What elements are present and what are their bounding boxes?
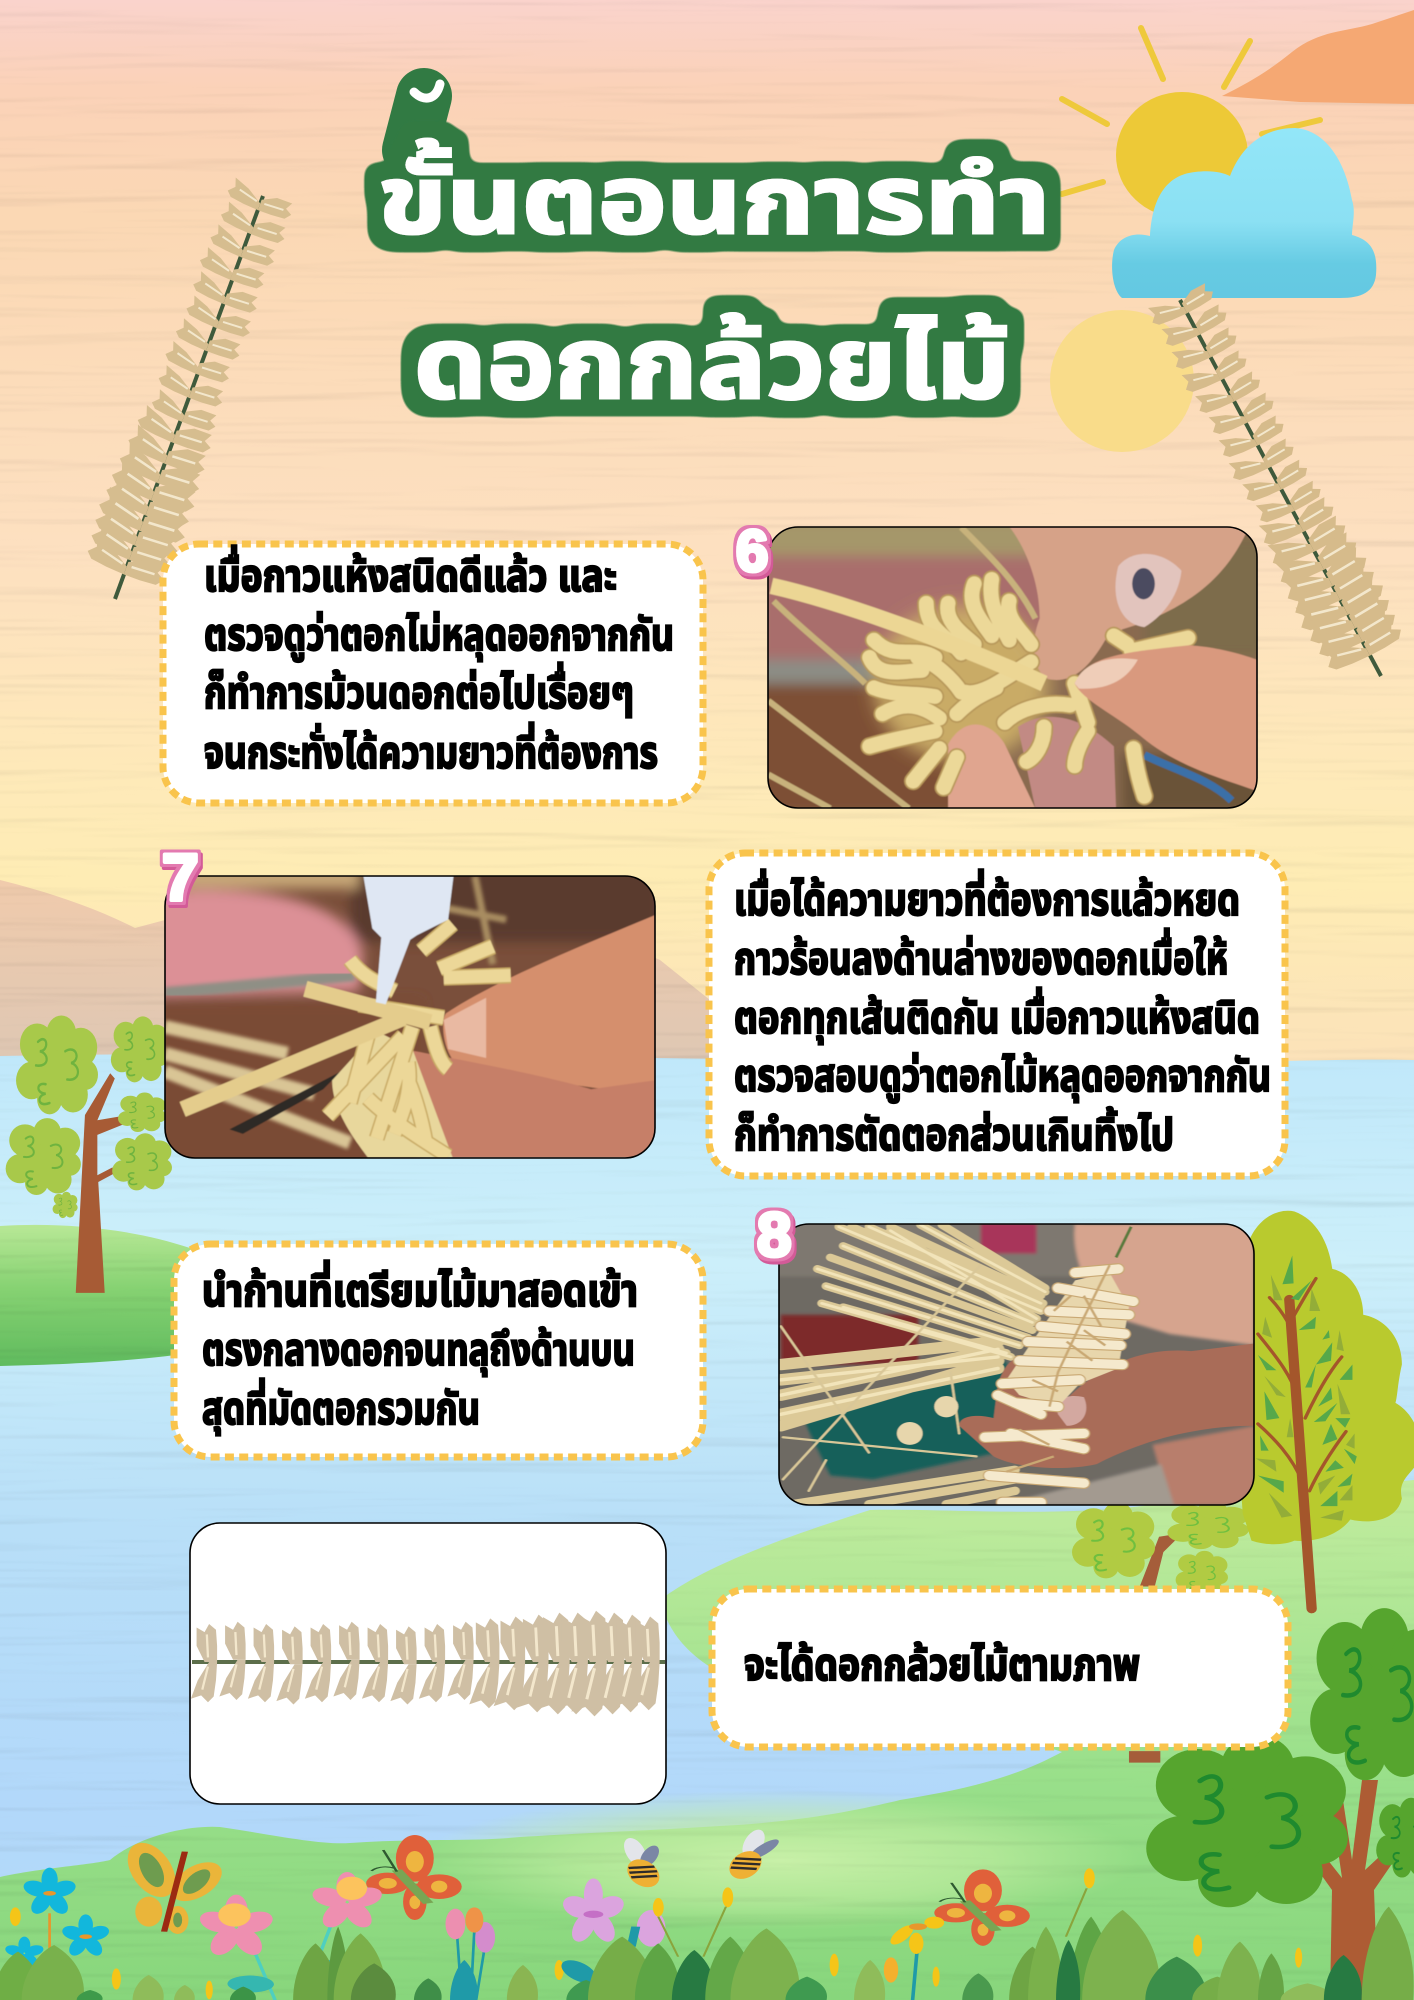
tree: dark green trees lower right: [1146, 1608, 1414, 2000]
text block: [734, 869, 1271, 1160]
text block: ตรวจสอบดูว่าตอกไม้หลุดออกจากกัน: [734, 1052, 1271, 1103]
panel: step 6 text: [163, 544, 703, 803]
photo content: [774, 1219, 1254, 1506]
flowers: tulips: [445, 1907, 495, 2000]
background sky: [0, 0, 1414, 1100]
foreground leaves: [0, 1907, 1414, 2000]
title outline accent: raised tone mark: [410, 84, 440, 150]
icon: blue cloud: [1112, 128, 1376, 298]
text block: เมื่อได้ความยาวที่ต้องการแล้วหยด: [734, 869, 1240, 925]
text block: สุดที่มัดตอกรวมกัน: [202, 1378, 480, 1436]
decoration: dried flower left: [79, 172, 308, 599]
panel: finished flower photo: [190, 1523, 666, 1804]
bee: left: [615, 1836, 678, 1888]
hill highlight: [420, 1790, 1140, 1930]
bottom garden: flowers, butterflies, bees, leaves: [0, 1829, 1414, 2000]
title line 1: ขั้นตอนการทำ: [378, 138, 1050, 253]
icon: pale yellow sun: [1050, 310, 1194, 452]
flowers: purple: [560, 1878, 666, 1947]
box: [712, 1589, 1288, 1747]
buds: [10, 1868, 1302, 1999]
finished flower: [191, 1611, 660, 1716]
decoration: dried flower right: [1135, 272, 1409, 678]
text block: นำก้านที่เตรียมไม้มาสอดเข้า: [202, 1260, 638, 1316]
box: [174, 1244, 703, 1457]
flowers: blue: [4, 1868, 111, 1970]
badge: 6: 6: [736, 519, 768, 584]
flower: yellow: [884, 1917, 944, 2000]
butterfly: orange left: [366, 1835, 462, 1920]
panel: step 8 photo: [757, 1201, 1254, 1506]
teal leaves: [219, 1957, 604, 1996]
icon: sun with rays: [1062, 28, 1320, 218]
text block: ตอกทุกเส้นติดกัน เมื่อกาวแห้งสนิด: [734, 987, 1260, 1045]
photo frame: [190, 1523, 666, 1804]
box: [163, 544, 703, 803]
text block: [202, 1260, 638, 1436]
photo frame: [165, 876, 655, 1158]
icon: orange cloud: [1222, 10, 1414, 104]
butterfly: yellow: [120, 1842, 232, 1934]
panel: step 6 photo: [736, 519, 1267, 814]
photo content: [154, 866, 662, 1165]
panel: step 7 photo: [154, 840, 662, 1165]
water: [0, 1054, 1414, 2000]
photo frame: [779, 1224, 1254, 1505]
trunk: [76, 1073, 123, 1293]
big tree leaves: [1256, 1255, 1357, 1521]
panel: step 7 text: [709, 853, 1285, 1176]
flower stem: [192, 1660, 665, 1664]
badge: 8: 8: [757, 1201, 791, 1270]
tree: right trees: [1072, 1211, 1414, 1763]
text block: จะได้ดอกกล้วยไม้ตามภาพ: [744, 1641, 1140, 1690]
butterfly: orange right: [934, 1869, 1030, 1946]
panel: step 8 text: [174, 1244, 703, 1457]
hill: left: [0, 1225, 320, 1366]
photo content: [756, 519, 1267, 814]
bee: right: [725, 1829, 788, 1880]
crowns: [6, 1015, 172, 1218]
big tree trunk and branches: [1258, 1278, 1346, 1609]
panel: result text: [712, 1589, 1288, 1747]
text block: กาวร้อนลงด้านล่างของดอกเมื่อให้: [734, 928, 1228, 984]
big yellow-green tree crown: [1240, 1211, 1414, 1544]
small tree behind box: [1072, 1501, 1249, 1763]
hill: right and bottom: [0, 1480, 1414, 2000]
title line 2: ดอกกล้วยไม้: [414, 308, 1010, 420]
tree: left small tree: [6, 1015, 172, 1293]
text block: ก็ทำการตัดตอกส่วนเกินทิ้งไป: [734, 1107, 1174, 1160]
text block: ตรงกลางดอกจนทลุถึงด้านบน: [202, 1326, 635, 1377]
text block: ตรวจดูว่าตอกไม่หลุดออกจากกัน: [204, 611, 674, 662]
text block: จนกระทั่งได้ความยาวที่ต้องการ: [204, 722, 658, 778]
trunk: [1300, 1780, 1398, 2000]
flowers: pink: [197, 1872, 385, 2000]
text block: เมื่อกาวแห้งสนิดดีแล้ว และ: [204, 545, 617, 601]
text block: ก็ทำการม้วนดอกต่อไปเรื่อยๆ: [204, 662, 634, 718]
crowns: [1146, 1608, 1414, 1907]
text block: [204, 545, 674, 778]
mountains: [0, 880, 710, 1075]
title: [378, 138, 1050, 420]
badge: 7: 7: [162, 840, 199, 914]
photo frame: [768, 527, 1257, 808]
box: [709, 853, 1285, 1176]
